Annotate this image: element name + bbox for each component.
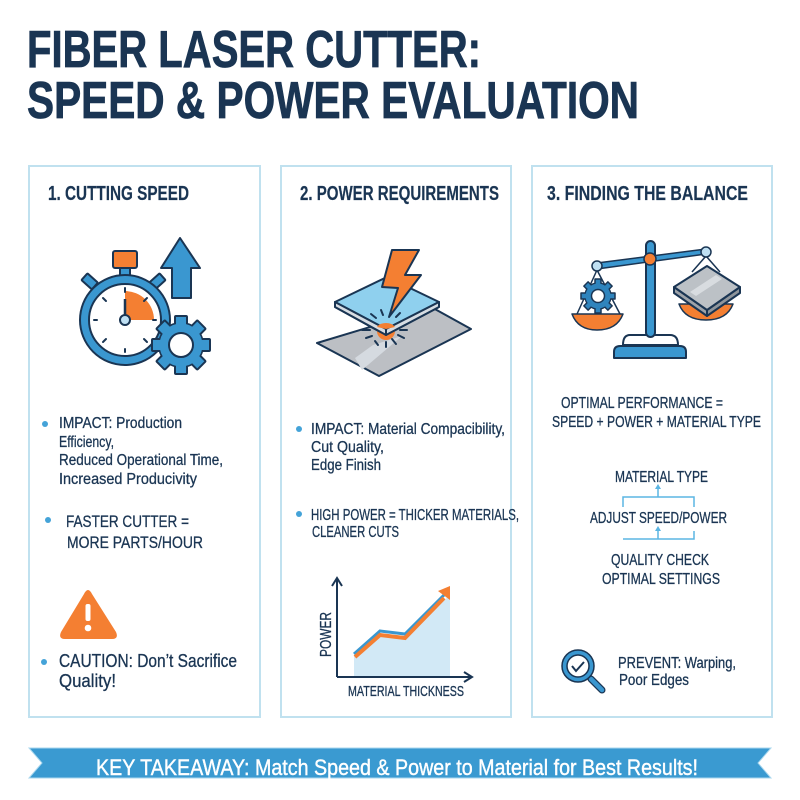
- bullet: impact on material: Edge Finish: [311, 457, 381, 474]
- title: SPEED & POWER EVALUATION: [27, 72, 639, 130]
- icon: balance scale: [572, 241, 740, 358]
- flow diagram: material to optimal settings: QUALITY CHECK: [611, 552, 709, 569]
- bullet: impact on material: [296, 421, 505, 474]
- bullet: faster cutter: [45, 512, 203, 552]
- title: FIBER LASER CUTTER:: [27, 21, 481, 79]
- icon: stopwatch with arrow and gear: [80, 238, 210, 374]
- bullet: impact on production: Increased Producivity: [59, 471, 197, 488]
- title: [27, 21, 639, 130]
- icon: magnifier with check: [562, 650, 602, 690]
- bullet: impact on material: Cut Quality,: [311, 439, 384, 456]
- icon: laser bolt on metal plates: [317, 250, 471, 376]
- panel: finding the balance: [532, 166, 772, 717]
- chart: power vs material thickness: POWER: [318, 612, 335, 657]
- flow diagram: material to optimal settings: MATERIAL TYPE: [615, 469, 708, 486]
- heading: cutting speed: 1. CUTTING SPEED: [48, 183, 189, 205]
- bullet: high power: [296, 507, 519, 541]
- flow diagram: material to optimal settings: [590, 469, 727, 588]
- heading: power requirements: 2. POWER REQUIREMENTS: [300, 183, 499, 205]
- bullet: high power: CLEANER CUTS: [312, 524, 399, 541]
- bullet: impact on material: IMPACT: Material Compacibility,: [311, 421, 505, 438]
- flow diagram: material to optimal settings: OPTIMAL SETTINGS: [602, 571, 720, 588]
- flow diagram: material to optimal settings: ADJUST SPEED/POWER: [590, 510, 727, 527]
- panel: power requirements: [281, 166, 519, 717]
- heading: finding the balance: 3. FINDING THE BALANCE: [547, 183, 748, 205]
- panel: cutting speed: [29, 166, 260, 717]
- note: prevent: Poor Edges: [619, 672, 689, 689]
- icon: warning triangle: [60, 590, 117, 639]
- bullet: impact on production: [42, 415, 223, 488]
- bullet: impact on production: Efficiency,: [59, 434, 114, 451]
- bullet: impact on production: Reduced Operational Time,: [59, 452, 223, 469]
- formula: optimal performance: OPTIMAL PERFORMANCE =: [561, 395, 723, 412]
- bullet: caution: Quality!: [59, 671, 116, 691]
- bullet: caution: [41, 651, 237, 691]
- bullet: high power: HIGH POWER = THICKER MATERIALS,: [311, 507, 519, 524]
- chart: power vs material thickness: [318, 578, 472, 700]
- note: prevent: [618, 655, 736, 689]
- bullet: faster cutter: FASTER CUTTER =: [66, 512, 189, 531]
- note: prevent: PREVENT: Warping,: [618, 655, 736, 672]
- bullet: caution: CAUTION: Don’t Sacrifice: [59, 651, 237, 671]
- chart: power vs material thickness: MATERIAL THICKNESS: [348, 683, 464, 700]
- bullet: faster cutter: MORE PARTS/HOUR: [67, 533, 203, 552]
- formula: optimal performance: [552, 395, 761, 431]
- bullet: impact on production: IMPACT: Production: [59, 415, 182, 432]
- banner: key takeaway: KEY TAKEAWAY: Match Speed & Power to Material for Best Results!: [96, 755, 698, 780]
